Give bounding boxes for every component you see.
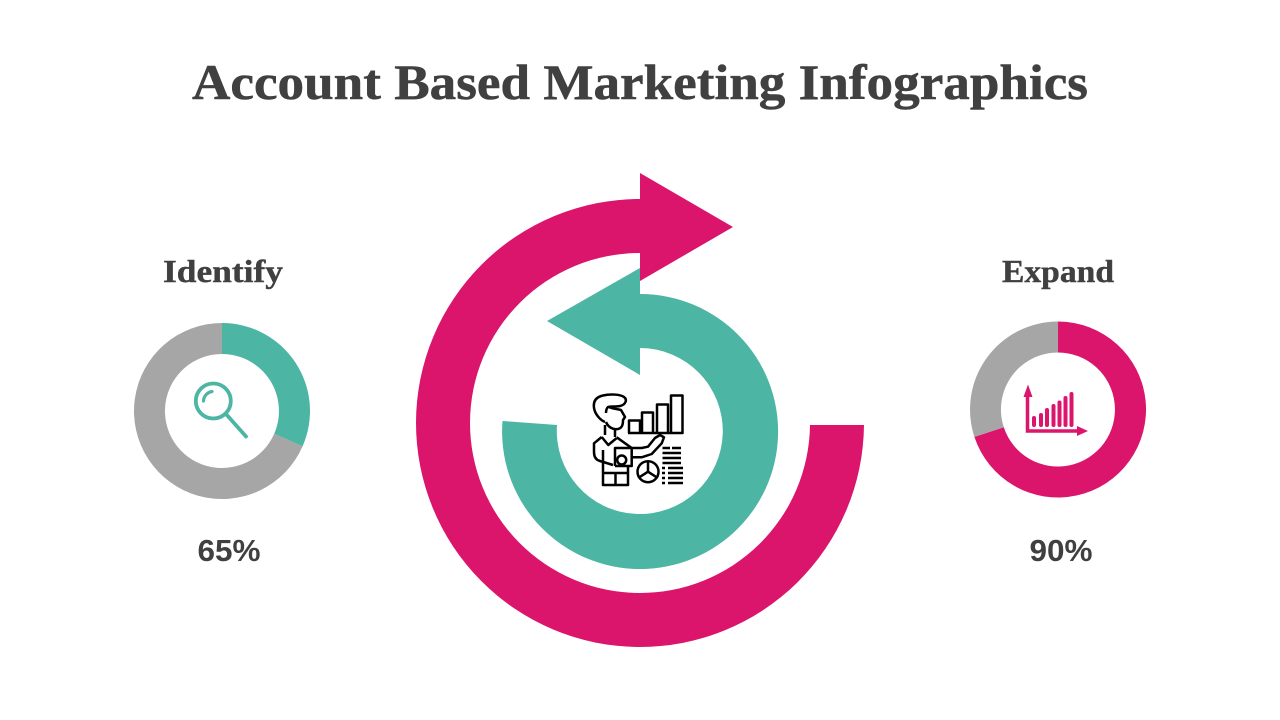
heading: Expand: Expand [1002,253,1114,289]
center graphic: circular arrows [416,173,864,647]
pink circular arrow [416,173,864,647]
heading: Identify: Identify [163,253,283,289]
icon: bar chart with axes [1024,384,1088,436]
donut chart: 65% [134,323,310,499]
teal circular arrow [502,268,778,569]
left panel: Identify [134,253,310,568]
value: 90%: 90% [1030,533,1092,568]
right panel: Expand [970,253,1146,568]
title: Account Based Marketing Infographics [192,54,1088,110]
icon: magnifying glass [196,384,246,436]
donut chart: 90% [970,322,1146,498]
icon: presenter with charts [594,395,683,485]
value: 65%: 65% [198,533,260,568]
